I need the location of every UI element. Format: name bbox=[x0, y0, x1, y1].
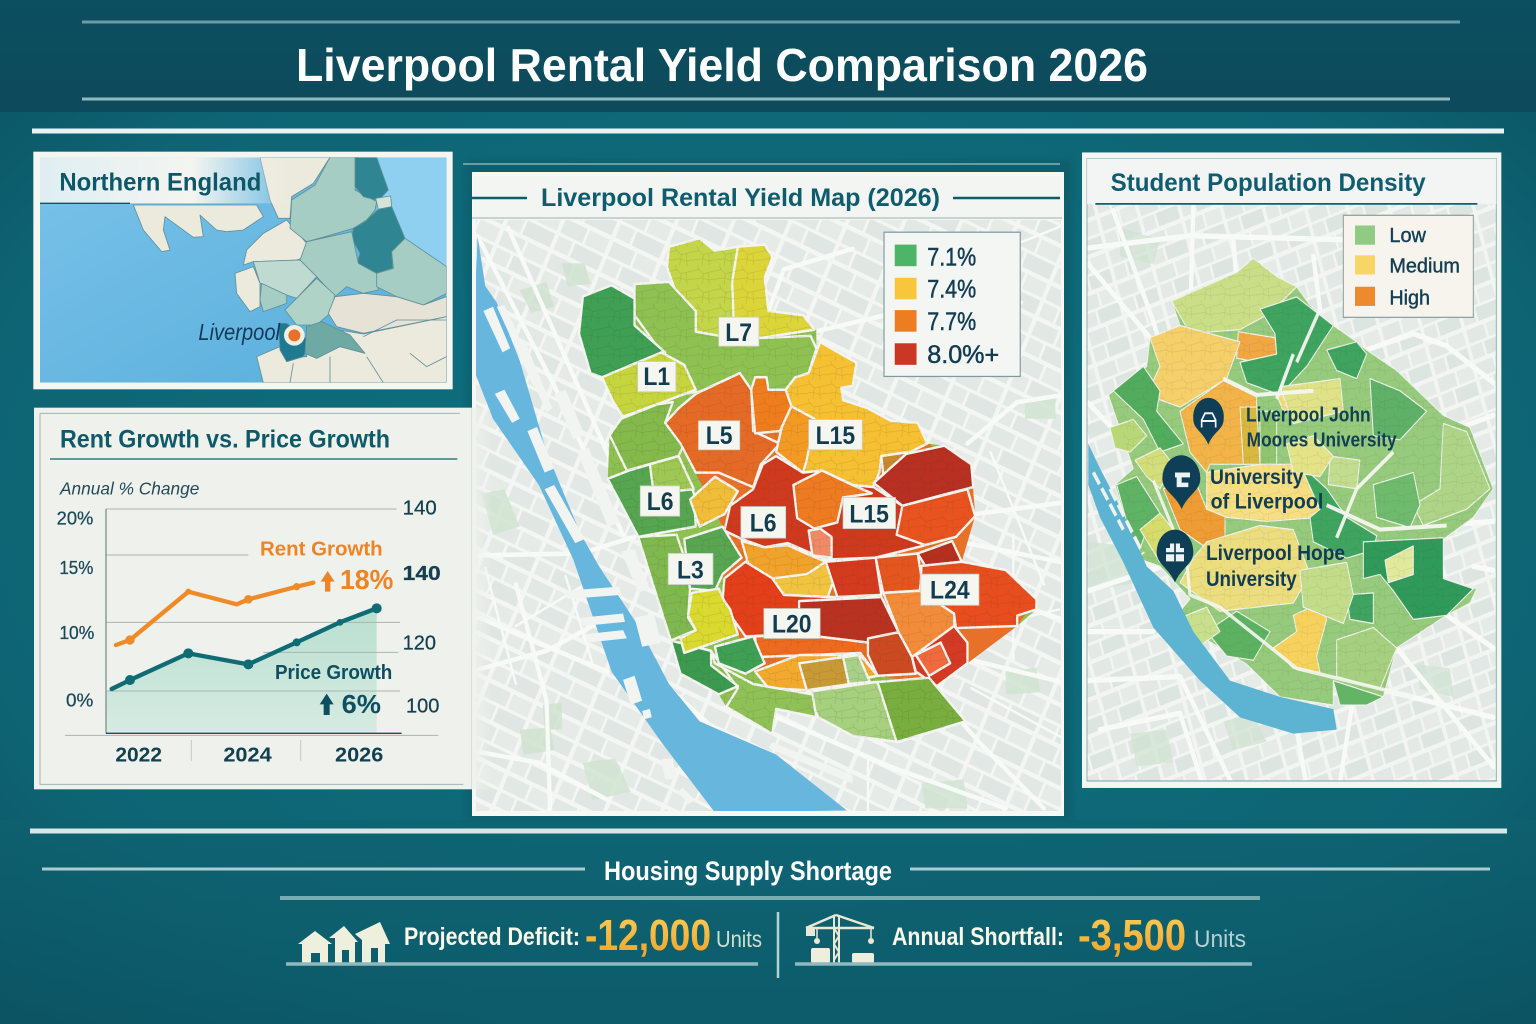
district labels: L6 bbox=[647, 488, 674, 516]
heading: student density: Student Population Density bbox=[1111, 168, 1426, 196]
district labels: L24 bbox=[930, 577, 970, 605]
pin: Liverpool John Moores University: Liverpool John bbox=[1246, 403, 1371, 426]
axis subtitle: Annual % Change bbox=[59, 478, 199, 498]
stat: projected deficit: Projected Deficit: bbox=[404, 923, 580, 951]
street map bbox=[1087, 203, 1496, 787]
legend: density: Low bbox=[1389, 223, 1427, 246]
callout: price growth 6%: 6% bbox=[342, 689, 381, 719]
right axis labels bbox=[403, 497, 441, 717]
legend: yield: 7.1% bbox=[927, 244, 976, 272]
panel: rent vs price growth chart bbox=[34, 408, 492, 789]
legend: density: High bbox=[1389, 286, 1430, 309]
river bbox=[1088, 444, 1337, 734]
district labels: L6 bbox=[750, 510, 777, 538]
series: rent growth bbox=[116, 583, 313, 645]
district texture bbox=[579, 238, 1036, 742]
district labels: L7 bbox=[725, 319, 752, 347]
right axis labels: 140 bbox=[403, 563, 441, 585]
left axis labels bbox=[57, 507, 94, 710]
x axis labels: 2026 bbox=[335, 744, 383, 767]
legend: yield: 7.4% bbox=[927, 276, 976, 304]
x axis labels: 2024 bbox=[223, 744, 272, 767]
panel: Northern England locator map bbox=[33, 152, 453, 389]
river Mersey bbox=[472, 236, 853, 813]
stat: annual shortfall: Units bbox=[1194, 926, 1246, 953]
stat: annual shortfall: Annual Shortfall: bbox=[892, 923, 1064, 951]
district labels: L3 bbox=[677, 556, 704, 585]
callout: rent growth 18%: 18% bbox=[340, 564, 393, 595]
pin: Liverpool John Moores University: Moores University bbox=[1247, 428, 1397, 451]
pin: Liverpool Hope University: Liverpool Hope bbox=[1206, 542, 1345, 566]
legend: yield: 8.0%+ bbox=[927, 341, 999, 369]
icon: construction crane bbox=[806, 915, 874, 963]
title: Liverpool Rental Yield Comparison 2026 bbox=[296, 39, 1148, 91]
marker: Liverpool: Liverpool bbox=[198, 319, 281, 345]
heading: yield map: Liverpool Rental Yield Map (2026) bbox=[541, 184, 940, 212]
panel: student population density bbox=[1082, 152, 1501, 788]
footer band bbox=[0, 820, 1536, 1024]
callout: price growth 6%: Price Growth bbox=[275, 662, 392, 684]
right axis labels: 120 bbox=[403, 632, 436, 654]
panel: main yield map bbox=[463, 160, 1072, 821]
stat: annual shortfall bbox=[795, 911, 1252, 964]
icon: houses bbox=[298, 922, 390, 963]
pin: Liverpool Hope University: University bbox=[1206, 567, 1297, 591]
pin: Liverpool John Moores University bbox=[1193, 398, 1397, 451]
left axis labels: 15% bbox=[59, 557, 93, 578]
x axis labels bbox=[115, 744, 383, 767]
pin: University of Liverpool: University bbox=[1210, 465, 1304, 489]
district labels bbox=[638, 317, 979, 639]
left axis labels: 20% bbox=[57, 507, 93, 528]
stat: projected deficit: Units bbox=[716, 926, 762, 952]
line chart bbox=[65, 509, 438, 761]
callout: rent growth 18%: Rent Growth bbox=[260, 538, 383, 561]
series: price growth bbox=[112, 603, 382, 689]
density regions bbox=[1108, 258, 1493, 705]
header band bbox=[0, 0, 1536, 112]
district labels: L1 bbox=[643, 363, 670, 391]
title bar: Northern England bbox=[59, 169, 261, 197]
callout: price growth 6% bbox=[275, 662, 392, 719]
stat: projected deficit bbox=[286, 911, 762, 964]
pin: University of Liverpool bbox=[1162, 455, 1323, 514]
legend: density bbox=[1343, 215, 1473, 317]
pin: University of Liverpool: of Liverpool bbox=[1211, 490, 1323, 514]
callout: rent growth 18% bbox=[260, 538, 393, 595]
title bar bbox=[40, 157, 293, 203]
district labels: L20 bbox=[772, 611, 812, 639]
heading: chart: Rent Growth vs. Price Growth bbox=[60, 427, 390, 454]
street map bbox=[470, 220, 1070, 821]
stat: projected deficit: -12,000 bbox=[585, 911, 711, 960]
right axis labels: 100 bbox=[406, 695, 439, 717]
district labels: L15 bbox=[849, 501, 889, 529]
legend: yield: 7.7% bbox=[927, 308, 976, 336]
pin: Liverpool Hope University bbox=[1157, 530, 1345, 591]
heading: housing supply shortage: Housing Supply Shortage bbox=[604, 856, 892, 886]
legend: density: Medium bbox=[1389, 254, 1460, 277]
hot zone underlay bbox=[682, 432, 1026, 679]
heading: student density bbox=[1087, 159, 1496, 204]
right axis labels: 140 bbox=[403, 497, 437, 519]
district labels: L15 bbox=[816, 422, 855, 450]
stat: annual shortfall: -3,500 bbox=[1078, 911, 1186, 960]
district labels: L5 bbox=[706, 422, 732, 450]
legend: yield bbox=[884, 232, 1020, 376]
districts underlay bbox=[608, 318, 1034, 706]
left axis labels: 0% bbox=[66, 689, 93, 710]
x axis labels: 2022 bbox=[115, 744, 162, 767]
districts: yield colours bbox=[579, 238, 1036, 742]
left axis labels: 10% bbox=[59, 622, 94, 643]
